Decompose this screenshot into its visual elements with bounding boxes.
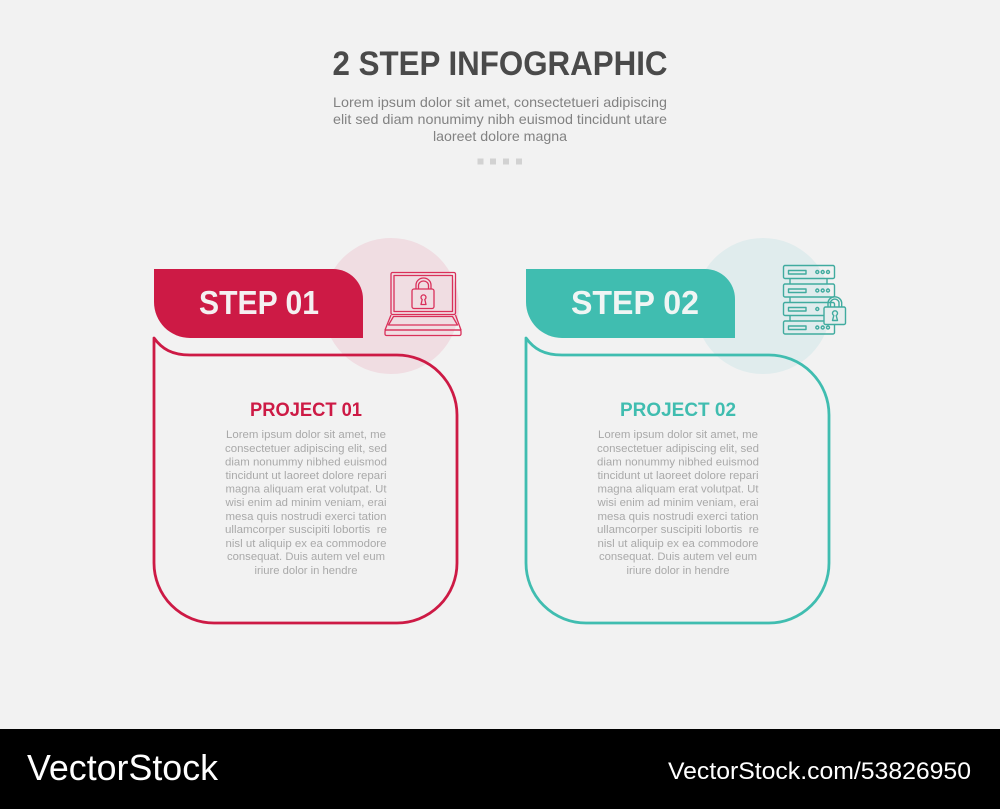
project 01 heading: PROJECT 01 <box>250 400 362 421</box>
step 01 tab <box>154 269 363 338</box>
project 01 body text: tincidunt ut laoreet dolore repari <box>226 470 386 482</box>
project 01 body text: consequat. Duis autem vel eum <box>227 551 385 563</box>
project 02 body text: Lorem ipsum dolor sit amet, me <box>598 429 758 441</box>
icon: laptop with lock <box>385 272 461 336</box>
subtitle text block: elit sed diam nonumimy nibh euismod tincidunt utare <box>333 111 667 127</box>
panel: step 02 <box>526 238 846 623</box>
project 02 body text: consequat. Duis autem vel eum <box>599 551 757 563</box>
background circle 01 <box>323 238 459 374</box>
step 02 label: STEP 02 <box>571 284 699 321</box>
subtitle text block: Lorem ipsum dolor sit amet, consectetueri adipiscing <box>333 94 667 110</box>
footer image id: VectorStock.com/53826950 <box>668 758 971 785</box>
panel: step 01 <box>154 238 461 623</box>
project 02 body text: consectetuer adipiscing elit, sed <box>597 443 759 455</box>
project 01 body text: consectetuer adipiscing elit, sed <box>225 443 387 455</box>
project 01 body text: diam nonummy nibhed euismod <box>225 456 387 468</box>
project 02 body text: mesa quis nostrudi exerci tation <box>598 511 758 523</box>
background circle 02 <box>695 238 831 374</box>
footer brand: VectorStock <box>27 747 219 788</box>
subtitle text block: laoreet dolore magna <box>433 128 567 144</box>
project 02 body text: diam nonummy nibhed euismod <box>597 456 759 468</box>
step 02 tab <box>526 269 735 338</box>
project 02 heading: PROJECT 02 <box>620 400 736 421</box>
title: 2 STEP INFOGRAPHIC <box>332 45 668 83</box>
project 01 body text: nisl ut aliquip ex ea commodore <box>226 538 386 550</box>
project 01 body text: Lorem ipsum dolor sit amet, me <box>226 429 386 441</box>
step 01 label: STEP 01 <box>199 284 319 321</box>
project 01 card outline <box>154 338 457 623</box>
project 02 body text: tincidunt ut laoreet dolore repari <box>598 470 758 482</box>
project 02 card outline <box>526 338 829 623</box>
project 01 body text: ullamcorper suscipiti lobortis re <box>225 524 387 536</box>
project 02 body text: magna aliquam erat volutpat. Ut <box>598 484 758 496</box>
icon: server with lock <box>784 266 846 334</box>
footer bar <box>0 729 1000 809</box>
project 02 body text: iriure dolor in hendre <box>626 565 730 577</box>
project 01 body text: mesa quis nostrudi exerci tation <box>226 511 386 523</box>
project 01 body text <box>224 429 387 577</box>
project 01 body text: magna aliquam erat volutpat. Ut <box>226 484 386 496</box>
project 01 body text: iriure dolor in hendre <box>254 565 358 577</box>
project 01 body text: wisi enim ad minim veniam, erai <box>224 497 386 509</box>
project 02 body text <box>596 429 759 577</box>
dots divider <box>478 158 522 164</box>
project 02 body text: ullamcorper suscipiti lobortis re <box>597 524 759 536</box>
project 02 body text: nisl ut aliquip ex ea commodore <box>598 538 758 550</box>
project 02 body text: wisi enim ad minim veniam, erai <box>596 497 758 509</box>
subtitle text block <box>333 94 667 144</box>
